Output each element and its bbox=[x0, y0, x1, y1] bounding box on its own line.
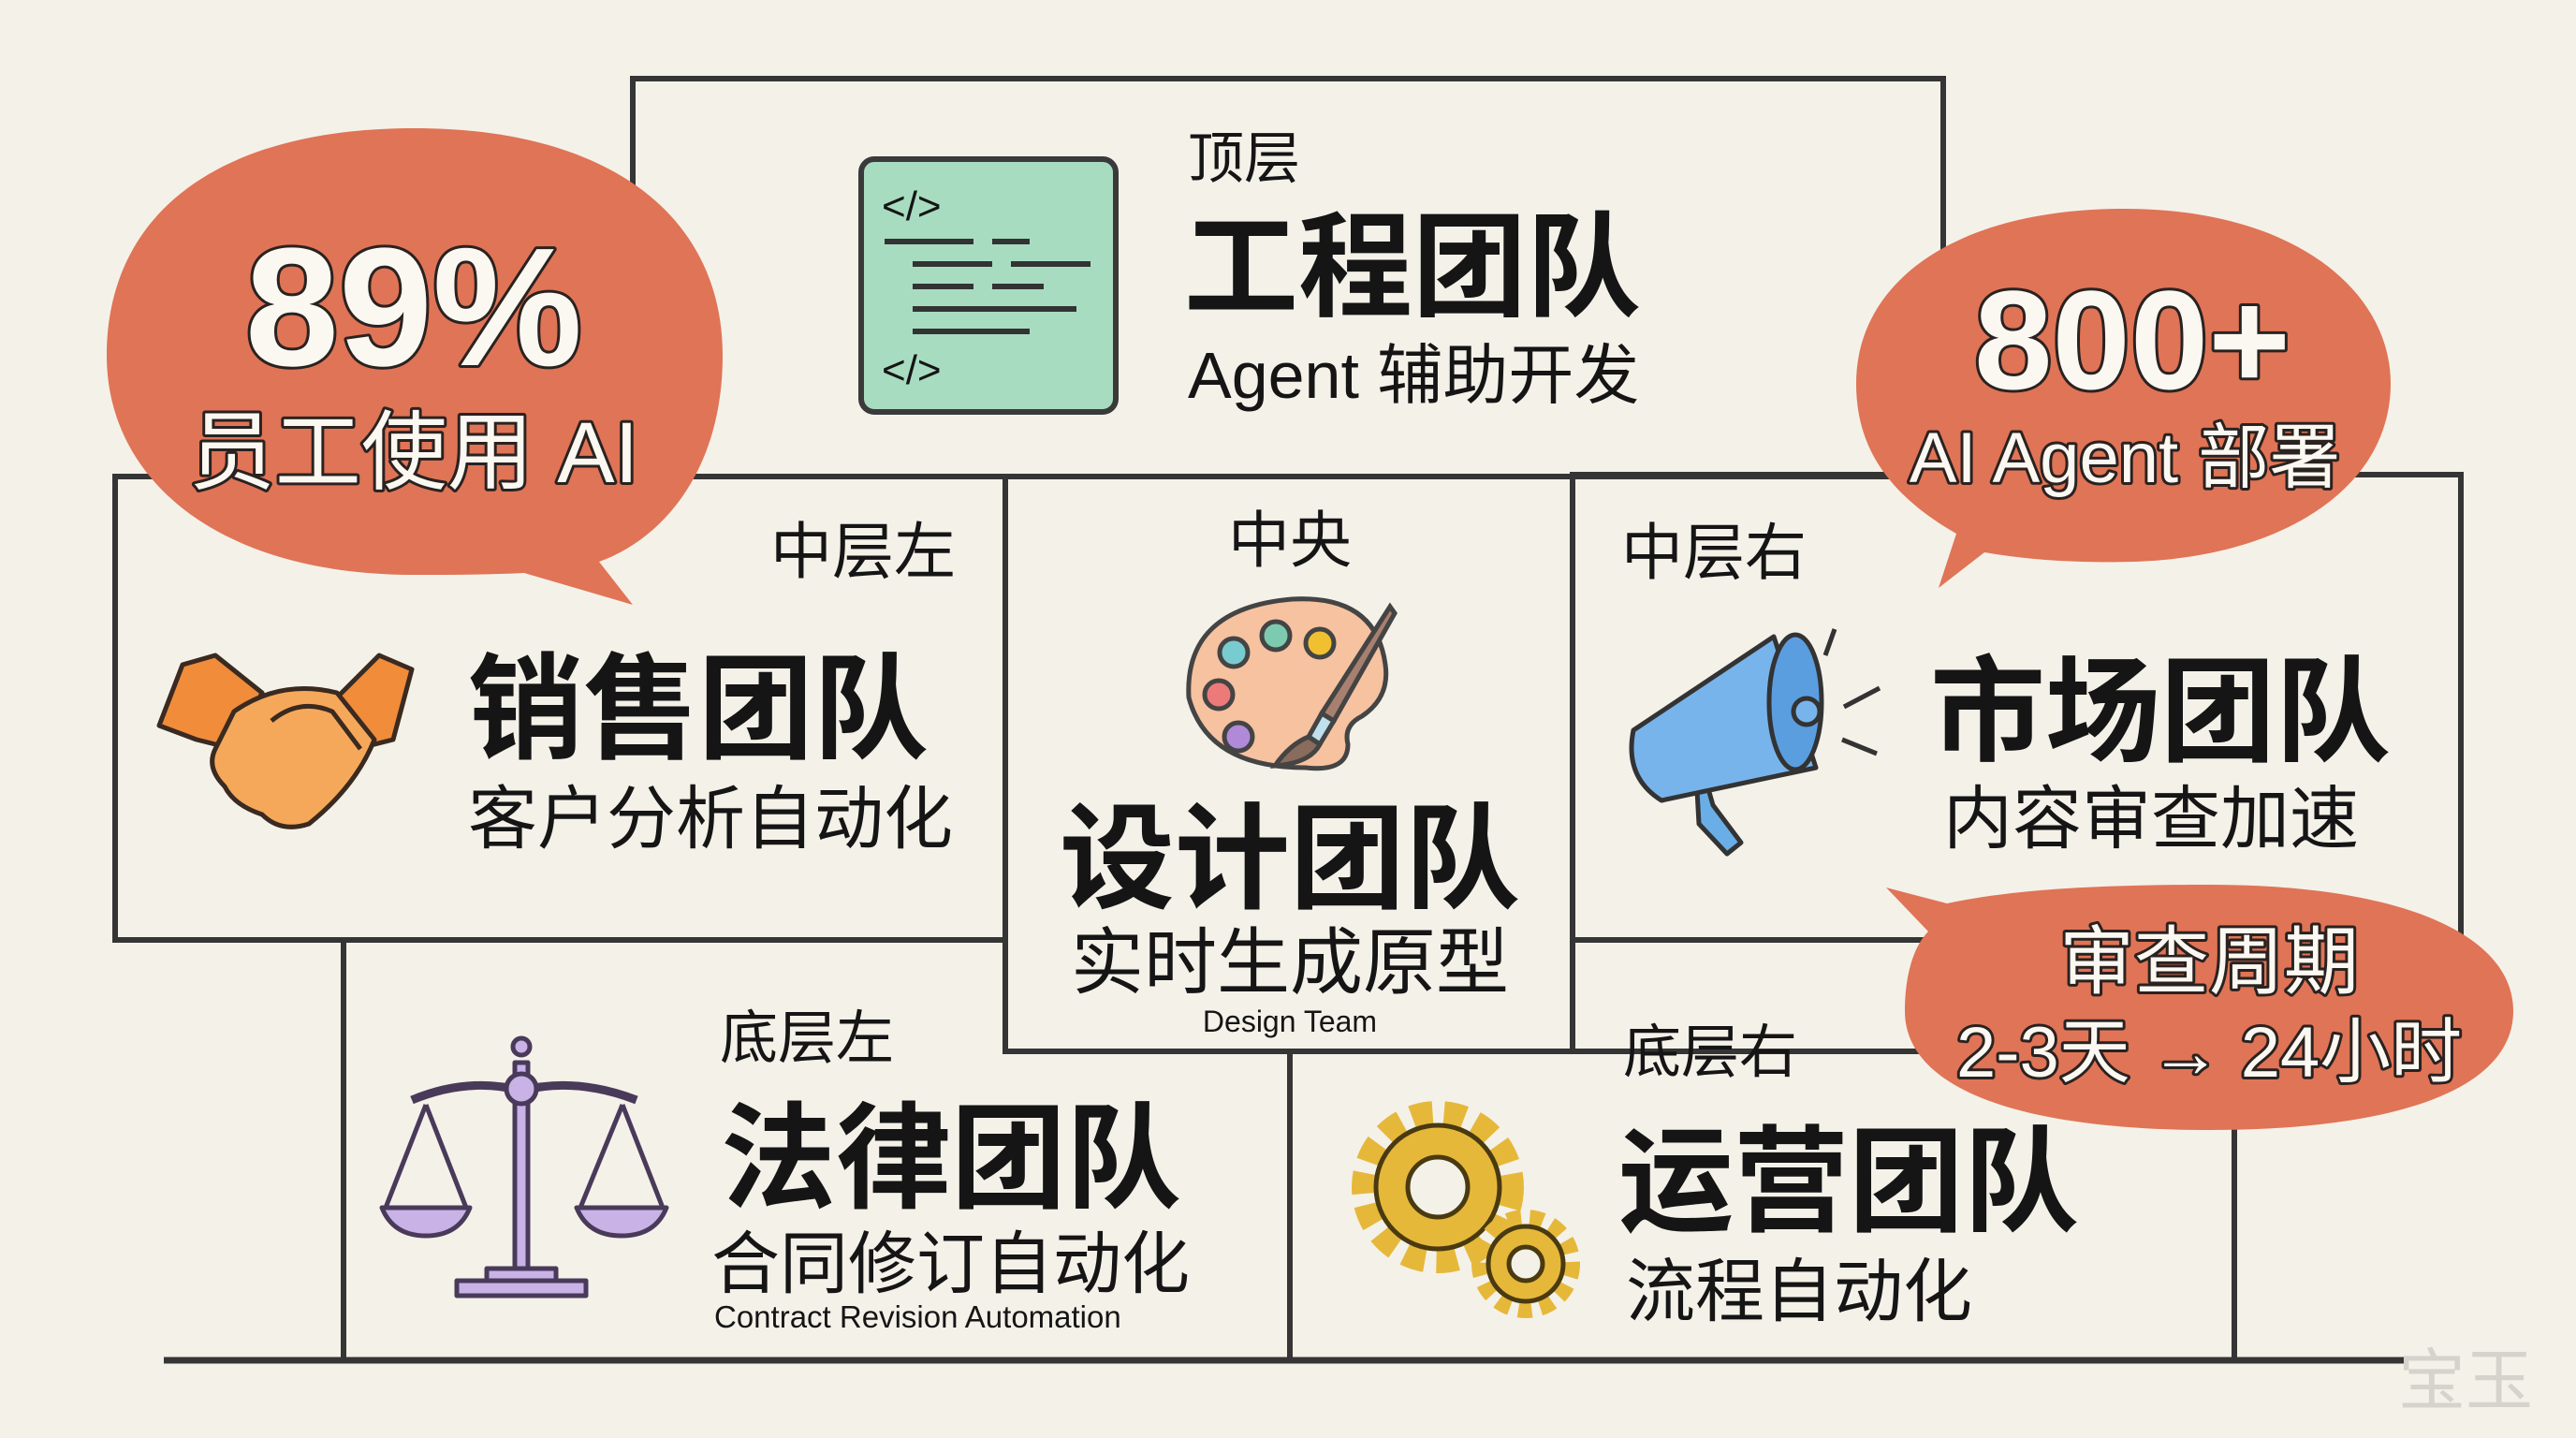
panel: center design bbox=[1005, 477, 1573, 1051]
panel: bottom-left legal bbox=[344, 940, 1290, 1360]
text: marketing bbox=[1621, 518, 2391, 858]
icon: gears bbox=[1365, 1114, 1571, 1309]
text: operations: 流程自动化 bbox=[1626, 1253, 1972, 1330]
text: engineering: 工程团队 bbox=[1184, 204, 1641, 331]
icon: code window: </> bbox=[882, 183, 942, 229]
icon: handshake bbox=[159, 655, 412, 827]
callout: 800+ AI agents bbox=[1856, 209, 2391, 588]
text: design: Design Team bbox=[1203, 1005, 1377, 1038]
callout: 89% employees use AI: 员工使用 AI bbox=[189, 405, 638, 501]
panel: middle-left sales bbox=[115, 477, 1005, 940]
callout: 89% employees use AI bbox=[107, 128, 723, 605]
text: sales bbox=[468, 517, 956, 858]
icon: palette bbox=[1189, 599, 1395, 769]
text: sales: 销售团队 bbox=[468, 646, 929, 774]
callout: review cycle bbox=[1886, 885, 2513, 1130]
text: engineering: 顶层 bbox=[1188, 127, 1300, 190]
icon: code window: </> bbox=[882, 347, 942, 393]
callout: 89% employees use AI: 89% bbox=[245, 213, 582, 402]
callout: 800+ AI agents: 800+ bbox=[1974, 261, 2291, 418]
text: legal: 法律团队 bbox=[721, 1095, 1181, 1224]
panel: middle-right marketing bbox=[1573, 475, 2461, 940]
icon: code window bbox=[861, 159, 1116, 412]
text: engineering bbox=[1184, 127, 1641, 412]
text: engineering: Agent 辅助开发 bbox=[1188, 339, 1639, 412]
text: legal: 合同修订自动化 bbox=[711, 1226, 1190, 1302]
text: legal: Contract Revision Automation bbox=[714, 1299, 1121, 1334]
callout: review cycle: 2-3天 → 24小时 bbox=[1956, 1013, 2462, 1093]
watermark: 宝玉 bbox=[2398, 1344, 2533, 1419]
text: design: 中央 bbox=[1228, 506, 1352, 575]
text: operations bbox=[1618, 1020, 2079, 1330]
callout: 800+ AI agents: AI Agent 部署 bbox=[1910, 418, 2340, 498]
text: operations: 底层右 bbox=[1623, 1020, 1797, 1085]
panel: top engineering bbox=[633, 79, 1943, 477]
text: marketing: 内容审查加速 bbox=[1943, 780, 2359, 858]
text: legal bbox=[711, 1006, 1190, 1334]
text: design: 设计团队 bbox=[1060, 796, 1520, 924]
text: design bbox=[1060, 506, 1520, 1038]
text: legal: 底层左 bbox=[720, 1006, 894, 1071]
text: sales: 中层左 bbox=[770, 517, 956, 586]
text: design: 实时生成原型 bbox=[1071, 921, 1509, 1004]
callout: review cycle: 审查周期 bbox=[2059, 920, 2359, 1004]
icon: scale bbox=[382, 1038, 666, 1296]
icon: megaphone bbox=[1632, 629, 1880, 854]
panel: bottom-right operations bbox=[1290, 1051, 2234, 1360]
text: marketing: 市场团队 bbox=[1930, 649, 2391, 777]
text: operations: 运营团队 bbox=[1618, 1119, 2079, 1247]
text: marketing: 中层右 bbox=[1621, 518, 1807, 587]
text: sales: 客户分析自动化 bbox=[468, 780, 953, 858]
